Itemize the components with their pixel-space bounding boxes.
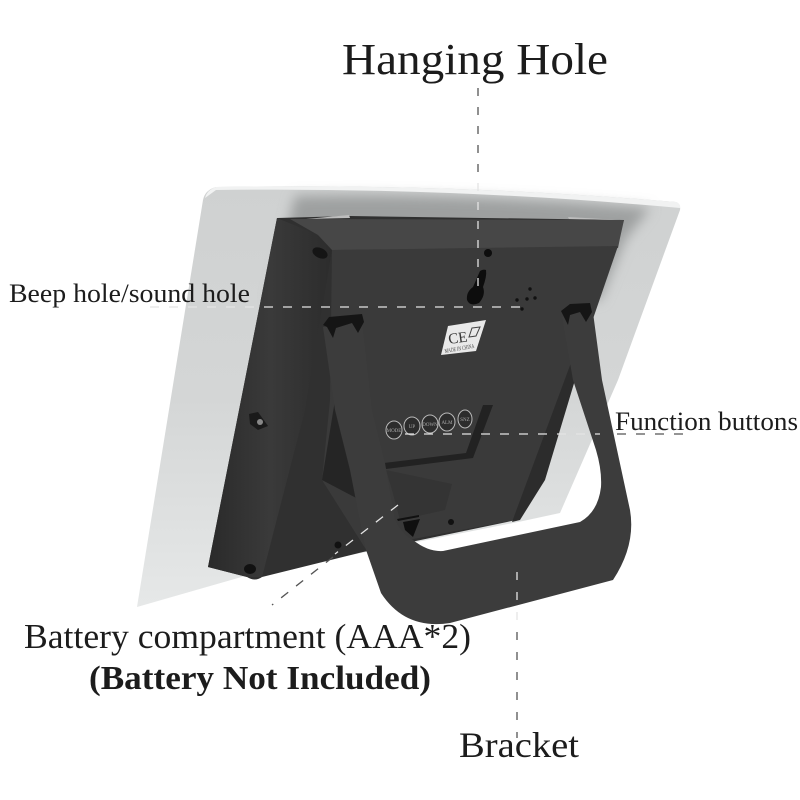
hanging hole keyhole (467, 249, 492, 304)
function buttons (386, 410, 472, 439)
leader: function buttons (405, 433, 684, 435)
leader: bracket (516, 572, 518, 738)
leader: hanging hole (477, 88, 479, 287)
black rear housing (208, 215, 624, 580)
function buttons: SNZ (460, 418, 470, 423)
recessed display panel (384, 405, 493, 469)
leader: battery compartment (272, 505, 398, 605)
leader: beep hole (150, 306, 523, 308)
function buttons: ALM (441, 421, 453, 426)
label: Battery Not Included: (Battery Not Included) (89, 660, 431, 697)
silver front panel (137, 186, 680, 607)
beep holes (515, 287, 537, 311)
CE label: CE (447, 329, 469, 348)
label: Function buttons: Function buttons (615, 407, 798, 436)
function buttons: MODE (387, 429, 401, 434)
CE label (441, 320, 486, 355)
label: Battery compartment: Battery compartment (AAA*2) (24, 617, 471, 656)
label: Beep hole/sound hole: Beep hole/sound hole (9, 279, 250, 308)
bracket stand (323, 303, 631, 624)
side bolts and holes (244, 245, 454, 574)
function buttons: UP (409, 425, 415, 430)
label: Bracket: Bracket (459, 725, 579, 765)
CE label: MADE IN CHINA (444, 344, 475, 355)
battery compartment cover (386, 470, 452, 520)
product: picture frame clock rear view (137, 186, 680, 624)
function buttons: DOWN (422, 423, 438, 428)
label: Hanging Hole: Hanging Hole (342, 35, 608, 84)
